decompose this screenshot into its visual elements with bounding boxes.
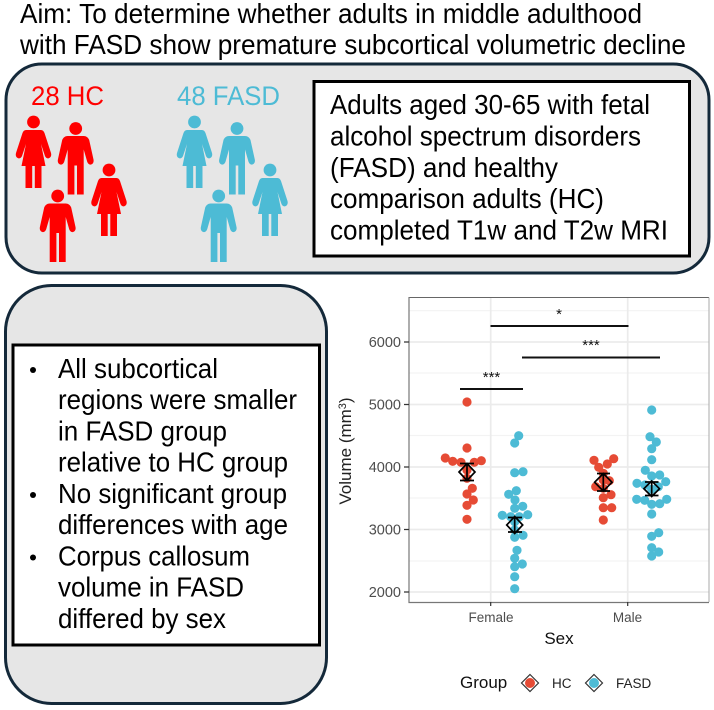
panel: participants [6,64,709,273]
significance brackets: *** [582,337,600,354]
legend: HC [552,676,572,691]
legend: FASD [616,676,652,691]
x axis title: Sex [544,629,574,648]
x axis labels: Male [613,610,642,625]
y axis tick labels: 3000 [369,522,401,538]
panel: findings [6,286,326,704]
text block: key findings: relative to HC group [58,446,288,478]
text block: key findings: All subcortical [58,353,218,384]
y axis title: 3 [337,403,349,409]
x axis labels: Female [468,610,514,625]
text block: participant description: alcohol spectrum disorders [330,120,641,152]
text block: key findings: differences with age [58,509,288,540]
chart: volume by sex and group [336,297,709,692]
text block: participant description: (FASD) and healthy [330,152,558,183]
significance brackets [460,306,660,389]
text block: participant description [314,82,690,256]
y axis tick labels: 4000 [369,460,401,476]
text block: key findings: No significant group [58,478,287,509]
heading: 28 HC: 28 HC [31,81,104,111]
text block: key findings: Corpus callosum [58,540,250,572]
text block: key findings: in FASD group [58,416,227,446]
significance brackets: *** [483,369,500,386]
title: with FASD show premature subcortical volumetric decline [19,29,686,60]
y axis tick labels: 6000 [369,335,401,351]
icon: FASD people [177,116,288,262]
y axis tick labels: 2000 [369,585,401,601]
mean and error markers [459,464,660,534]
y axis title: Volume (mm [336,409,355,505]
heading: 48 FASD: 48 FASD [177,81,280,111]
y axis title: ) [336,397,355,403]
icon: HC people [16,116,127,262]
HC data points [441,397,618,525]
text block: key findings: differed by sex [58,603,226,634]
significance brackets: * [556,306,562,323]
legend [460,673,652,692]
text block: participant description: completed T1w and T2w MRI [330,214,668,246]
text block: key findings: regions were smaller [58,384,297,415]
y axis tick labels: 5000 [369,398,401,414]
text block: participant description: comparison adults (HC) [330,183,604,214]
legend: Group [460,673,507,692]
text block: participant description: Adults aged 30-65 with fetal [330,89,650,120]
text block: key findings [13,345,320,645]
title [19,0,686,60]
y axis tick labels [369,335,401,601]
x axis labels [468,610,642,625]
FASD data points [498,405,671,593]
text block: key findings: volume in FASD [58,572,244,602]
